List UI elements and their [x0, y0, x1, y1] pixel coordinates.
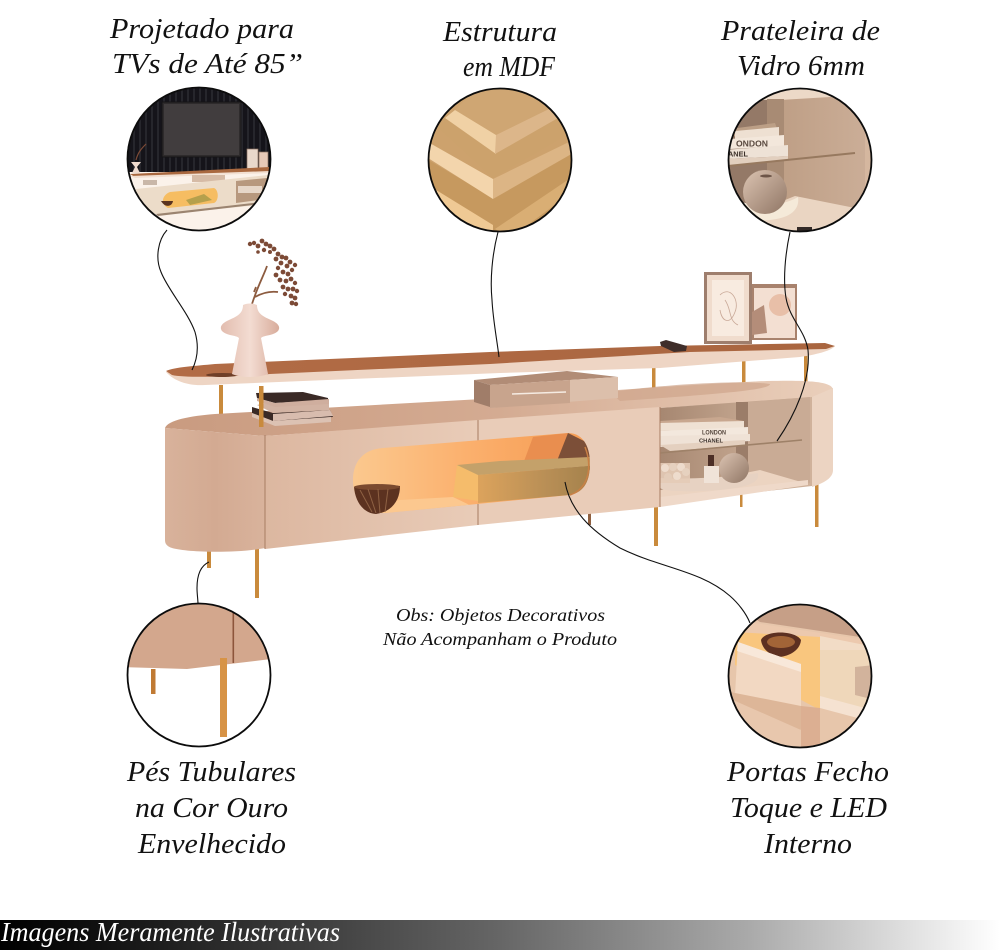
sphere: [743, 170, 787, 214]
note: decorative objects: [382, 605, 617, 649]
niche outline rim: [570, 447, 589, 495]
leader: door callout: [565, 482, 750, 623]
floor rail: [156, 202, 254, 216]
top board face: [455, 85, 553, 135]
label: doors: [726, 757, 889, 860]
leader: MDF callout: [491, 232, 499, 357]
black base: [797, 227, 812, 231]
right inner wall: [748, 397, 810, 483]
gold box left face: [453, 465, 490, 503]
circle: gold legs: [126, 602, 272, 748]
second board right edge: [493, 142, 570, 199]
front leg on shelf: [259, 386, 264, 427]
books: [734, 123, 776, 137]
cabinet top surface: [165, 381, 833, 436]
product: TV stand: [165, 239, 835, 598]
label: glass shelf: Vidro 6mm: [737, 51, 865, 82]
lit opening: [163, 188, 218, 208]
remote control: [660, 340, 687, 352]
books in niche: [524, 433, 568, 460]
bowl: [761, 632, 801, 657]
note: decorative objects: Obs: Objetos Decorativos: [396, 605, 605, 625]
lit interior: [735, 632, 820, 710]
cabinet body: [128, 604, 268, 669]
book stack: CHANEL: [699, 438, 724, 444]
vase shadow on shelf: [206, 373, 238, 377]
label: TVs: [109, 14, 303, 80]
door seams: [265, 407, 660, 549]
dried flowers: [248, 239, 299, 306]
book stack: LONDON: [702, 430, 726, 436]
right door: [820, 636, 875, 658]
label: glass shelf: [720, 16, 880, 82]
side post: [767, 99, 784, 180]
label: MDF: Estrutura: [442, 17, 557, 48]
right door: [478, 407, 660, 525]
long leg: [220, 658, 227, 737]
shadow on cabinet top: [610, 382, 770, 401]
right end panel: [812, 388, 833, 487]
label: TVs: TVs de Até 85”: [112, 49, 303, 80]
leader lines: [158, 230, 808, 623]
tray with objects: [660, 453, 758, 491]
circle: glass shelf: [728, 88, 872, 232]
glass shelf: [660, 440, 802, 453]
niche floor: [382, 497, 468, 513]
label: legs: na Cor Ouro: [135, 793, 288, 824]
left rounded end: [165, 428, 265, 552]
slatted wall: [128, 88, 270, 172]
top surface: [720, 595, 880, 640]
second board left edge: [428, 142, 493, 199]
leader: TV callout: [158, 230, 197, 370]
top band: [763, 89, 832, 100]
TV: [162, 102, 241, 157]
label: glass shelf: Prateleira de: [720, 16, 880, 47]
footer bar: [0, 917, 1000, 950]
floor: [763, 196, 852, 230]
cabinet: [136, 175, 268, 215]
front panel lip: [660, 480, 808, 507]
back wall: [660, 397, 812, 503]
picture frames: [704, 272, 797, 344]
compartment floor: [660, 470, 808, 503]
label: legs: Envelhecido: [137, 829, 286, 860]
book stack: [660, 417, 750, 451]
third board: [430, 155, 570, 230]
second board top: [432, 115, 575, 178]
leader: legs callout: [197, 562, 209, 604]
circle: MDF boards: [428, 88, 572, 232]
label: MDF: [442, 17, 557, 83]
label: TVs: Projetado para: [109, 14, 294, 45]
vase with branch: [221, 239, 299, 377]
footer bar: Imagens Meramente Ilustrativas: [0, 917, 340, 947]
game console: [474, 371, 618, 408]
console and books: [192, 175, 225, 182]
frames: [247, 149, 258, 169]
gold box inside: [457, 457, 590, 475]
glass door: [735, 642, 801, 728]
label: legs: [126, 757, 296, 860]
top shelf underside: [166, 346, 835, 385]
label: doors: Interno: [763, 829, 852, 860]
small frame: [752, 284, 797, 340]
shelf: [130, 167, 270, 176]
door seam: [232, 613, 234, 663]
lit niche: [353, 433, 590, 513]
short leg: [151, 669, 156, 694]
lower panel: [720, 700, 801, 755]
label: MDF: em MDF: [463, 52, 556, 83]
bowl: [744, 197, 798, 220]
note: decorative objects: Não Acompanham o Produto: [382, 629, 617, 649]
top shelf wood surface: [166, 343, 835, 377]
open compartment: [660, 388, 833, 507]
vase body: [221, 304, 279, 377]
centre divider: [736, 402, 748, 472]
circle: glass shelf: ONDON: [736, 140, 768, 148]
left door: [265, 420, 478, 549]
top board left edge: [445, 110, 496, 154]
label: doors: Toque e LED: [730, 793, 887, 824]
vase: [131, 162, 141, 173]
books on cabinet: [252, 392, 333, 426]
label: legs: Pés Tubulares: [126, 757, 296, 788]
gold box front face: [478, 466, 590, 503]
circle: touch doors and LED: [720, 595, 880, 755]
back legs under top shelf: [207, 355, 818, 598]
label: doors: Portas Fecho: [726, 757, 889, 788]
branch: [252, 266, 278, 304]
leader: glass shelf callout: [777, 232, 808, 441]
right wall: [865, 134, 870, 186]
circle: TV on wall: [126, 86, 272, 232]
bowl: [354, 484, 400, 514]
glass shelf: [728, 153, 855, 166]
circle: glass shelf: ANEL: [728, 152, 749, 158]
top board right edge: [495, 109, 557, 154]
large frame: [704, 272, 752, 344]
